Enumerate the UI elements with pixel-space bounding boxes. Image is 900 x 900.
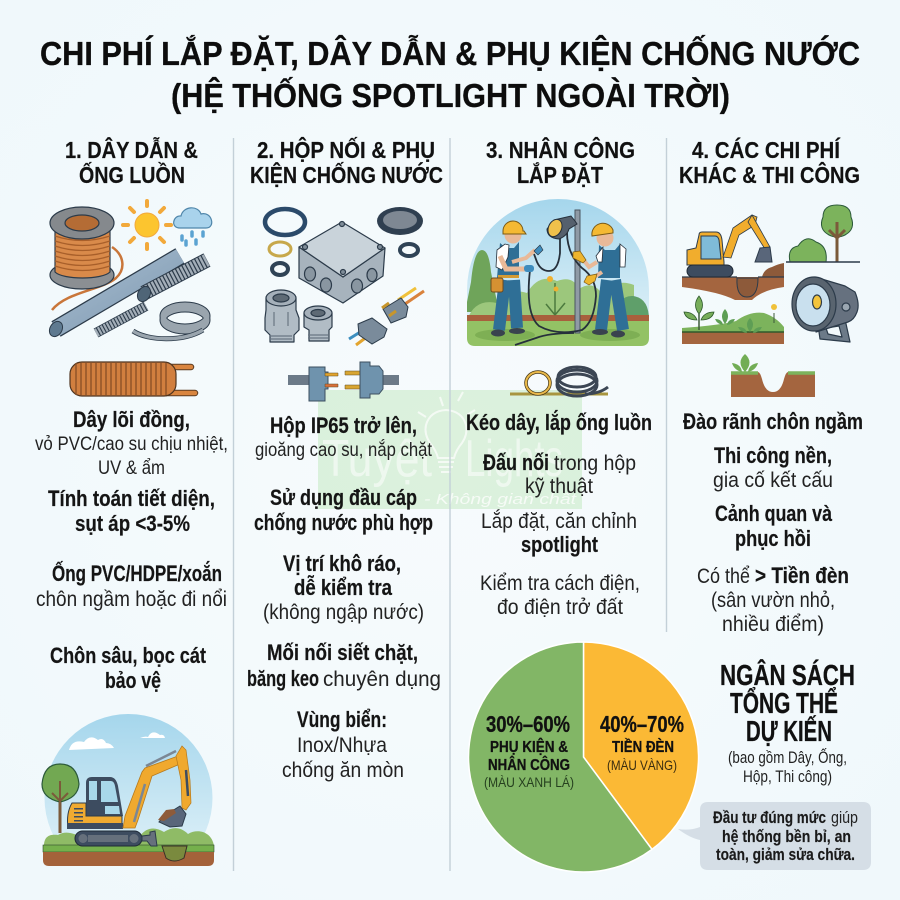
icon: rain cloud — [174, 208, 212, 245]
heading: overall budget: TỔNG THỂ — [730, 686, 838, 720]
heading: column 4 — [679, 136, 860, 188]
heading: column 1 — [65, 135, 198, 188]
text: connect: Đấu nối — [483, 450, 549, 475]
text: may exceed lamp cost — [697, 563, 849, 636]
text: test: Kiểm tra cách điện, — [480, 571, 640, 595]
text: conduit types — [36, 560, 227, 611]
icon: landscaping — [682, 296, 784, 344]
heading: column 4: 4. CÁC CHI PHÍ — [692, 136, 841, 163]
title: (HỆ THỐNG SPOTLIGHT NGOÀI TRỜI) — [171, 76, 730, 114]
callout: proper investment: giúp — [831, 809, 858, 827]
heading: overall budget: Hộp, Thi công) — [743, 767, 832, 786]
text: conduit types: chôn ngầm hoặc đi nổi — [36, 587, 227, 611]
callout: proper investment — [678, 802, 871, 870]
text: tight joints — [247, 640, 441, 691]
label: lamps: 40%–70% — [600, 711, 684, 737]
text: IP65 box: Hộp IP65 trở lên, — [270, 413, 417, 438]
text: cross-section: sụt áp <3-5% — [75, 511, 190, 536]
text: test: đo điện trở đất — [497, 595, 623, 619]
text: pull cable: Kéo dây, lắp ống luồn — [466, 410, 652, 435]
text: tight joints: chuyên dụng — [323, 667, 441, 691]
label: lamps: TIỀN ĐÈN — [612, 737, 674, 756]
heading: column 3 — [486, 136, 635, 188]
text: coastal areas: chống ăn mòn — [282, 758, 404, 782]
text: cable glands: Sử dụng đầu cáp — [270, 485, 417, 510]
icon: cable coils — [510, 367, 608, 396]
text: coastal areas — [282, 707, 404, 782]
title: CHI PHÍ LẮP ĐẶT, DÂY DẪN & PHỤ KIỆN CHỐNG NƯỚC — [40, 34, 860, 72]
text: copper core: vỏ PVC/cao su chịu nhiệt, — [35, 434, 228, 455]
text: copper core: UV & ẩm — [98, 458, 165, 479]
text: cross-section — [48, 486, 215, 536]
heading: column 4: KHÁC & THI CÔNG — [679, 161, 860, 188]
text: copper core: Dây lõi đồng, — [73, 407, 190, 432]
icon: excavator digging trench — [682, 215, 784, 300]
icon: waterproof connector inline — [288, 362, 399, 401]
icon: rubber gaskets — [265, 207, 423, 275]
text: landscape — [715, 501, 833, 551]
illustration: excavator in dome — [42, 714, 214, 882]
label: lamps: (MÀU VÀNG) — [607, 757, 677, 773]
text: dry location: (không ngập nước) — [263, 600, 424, 624]
text: dry location — [263, 551, 424, 624]
text: foundation: Thi công nền, — [714, 443, 832, 468]
panel: column 1 wires and conduit — [35, 135, 228, 882]
heading: overall budget: DỰ KIẾN — [746, 714, 832, 748]
panel: column 3 labour — [465, 136, 652, 619]
text: foundation — [713, 443, 833, 492]
illustration: two workers installing spotlight — [465, 199, 649, 346]
label: accessories and labour: 30%–60% — [486, 711, 570, 737]
panel: column 2 junction boxes — [247, 136, 443, 782]
heading: column 1: 1. DÂY DẪN & — [65, 135, 198, 163]
watermark: Tuyệt — [322, 430, 432, 488]
text: may exceed lamp cost: > Tiền đèn — [755, 563, 849, 588]
slice: lamps 40-70% — [584, 642, 699, 849]
heading: overall budget: NGÂN SÁCH — [720, 658, 855, 692]
text: install: Lắp đặt, căn chỉnh — [481, 508, 637, 533]
watermark — [318, 390, 582, 509]
text: connect: trong hộp — [554, 451, 636, 475]
callout: proper investment: hệ thống bền bỉ, an — [722, 828, 851, 846]
label: accessories and labour: PHỤ KIỆN & — [490, 737, 568, 756]
icon: trench cross-section — [731, 354, 815, 397]
heading: column 3: LẮP ĐẶT — [517, 161, 603, 188]
text: cable glands — [254, 485, 433, 535]
icon: sun — [123, 201, 171, 249]
text: IP65 box: gioăng cao su, nắp chặt — [255, 439, 433, 461]
text: may exceed lamp cost: Có thể — [697, 564, 750, 588]
text: burial: bảo vệ — [105, 668, 161, 693]
heading: overall budget: (bao gồm Dây, Ống, — [728, 747, 847, 767]
text: may exceed lamp cost: (sân vườn nhỏ, — [711, 588, 835, 612]
heading: column 2: 2. HỘP NỐI & PHỤ — [257, 136, 435, 163]
text: cable glands: chống nước phù hợp — [254, 510, 433, 535]
heading: overall budget — [720, 658, 855, 786]
title — [40, 34, 860, 114]
text: conduit types: Ống PVC/HDPE/xoắn — [52, 560, 222, 586]
text: copper core — [35, 407, 228, 479]
text: cross-section: Tính toán tiết diện, — [48, 486, 215, 511]
callout: proper investment: Đầu tư đúng mức — [713, 809, 826, 827]
text: landscape: Cảnh quan và — [715, 501, 833, 526]
callout: proper investment: toàn, giảm sửa chữa. — [716, 846, 855, 864]
text: trenching: Đào rãnh chôn ngầm — [683, 409, 863, 434]
text: connect — [483, 450, 636, 498]
heading: column 1: ỐNG LUỒN — [79, 161, 185, 188]
text: install — [481, 508, 637, 557]
text: install: spotlight — [521, 532, 599, 557]
text: tight joints: Mối nối siết chặt, — [267, 640, 418, 665]
text: test — [480, 571, 640, 619]
panel: column 4 other costs — [679, 136, 863, 636]
text: connect: kỹ thuật — [525, 474, 593, 498]
icon: copper coil — [70, 362, 195, 396]
icon: cable glands — [265, 290, 332, 342]
label: accessories and labour: NHÂN CÔNG — [488, 755, 570, 774]
text: landscape: phục hồi — [735, 526, 811, 551]
text: burial: Chôn sâu, bọc cát — [50, 643, 207, 668]
watermark: - Không gian chất — [424, 491, 577, 508]
text: coastal areas: Vùng biển: — [297, 707, 387, 732]
icon: tree and shrub — [786, 205, 860, 262]
heading: column 3: 3. NHÂN CÔNG — [486, 136, 635, 163]
icon: waterproof connectors angled — [349, 288, 424, 345]
slice: accessories and labour 30-60% — [469, 642, 652, 872]
label: accessories and labour: (MÀU XANH LÁ) — [484, 774, 574, 790]
text: burial — [50, 643, 207, 693]
text: tight joints: băng keo — [247, 666, 319, 691]
pie chart: budget split — [469, 642, 699, 872]
watermark: Lights — [465, 430, 563, 488]
text: coastal areas: Inox/Nhựa — [297, 733, 387, 757]
text: IP65 box — [255, 413, 433, 461]
text: dry location: Vị trí khô ráo, — [283, 551, 401, 576]
icon: junction box — [299, 222, 385, 303]
heading: column 2 — [250, 136, 443, 188]
text: foundation: gia cố kết cấu — [713, 468, 833, 492]
icon: copper wire spool — [50, 207, 122, 310]
text: may exceed lamp cost: nhiều điểm) — [722, 612, 824, 636]
heading: column 2: KIỆN CHỐNG NƯỚC — [250, 161, 443, 188]
icon: spotlight — [792, 277, 858, 342]
label: accessories and labour — [484, 711, 574, 790]
label: lamps — [600, 711, 684, 773]
text: dry location: dễ kiểm tra — [294, 575, 393, 600]
icon: rigid and corrugated conduits — [47, 256, 207, 339]
